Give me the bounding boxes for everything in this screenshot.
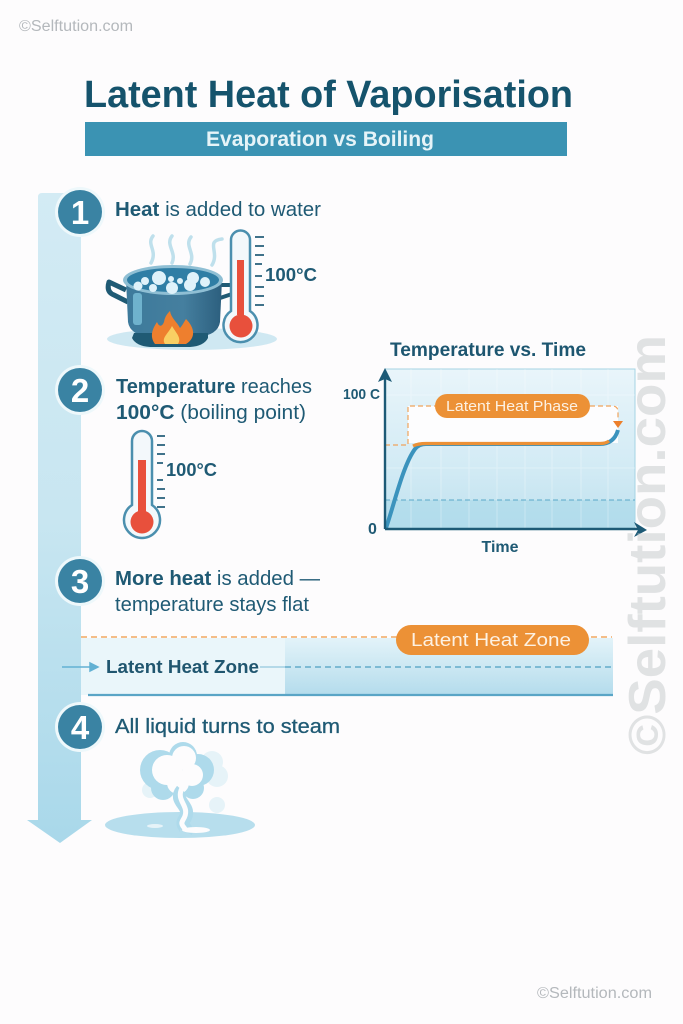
phase pill label: Latent Heat Phase [446,398,578,415]
step 2 badge [55,365,105,415]
step 2 text: Temperature reaches [116,376,312,398]
icon: boiling pot on flame [107,236,277,350]
step 3 badge [55,556,105,606]
step 3 text [115,568,320,616]
subtitle banner [85,122,567,156]
zone pill [396,625,589,655]
icon: steam cloud over puddle [105,742,255,838]
watermark: vertical: ©Selftution.com [619,335,677,755]
step 1 text: Heat is added to water [115,199,321,221]
icon: thermometer with 100°C (step 1): 100°C [265,265,317,285]
line chart: temperature vs time [343,368,647,556]
dashed guide [385,406,618,445]
plateau line [413,441,609,446]
watermark: top: ©Selftution.com [19,18,133,35]
step 2 badge: 2 [71,372,89,409]
axes [385,375,640,529]
flow arrow: left vertical [27,193,92,843]
step 1 badge [55,187,105,237]
step 1 badge: 1 [71,194,89,231]
zone pill label: Latent Heat Zone [411,630,571,650]
icon: thermometer with 100°C (step 2) [124,431,217,538]
phase pill [435,394,590,418]
x label: Time: Time [481,539,519,556]
watermark: bottom: ©Selftution.com [537,985,652,1002]
icon: thermometer with 100°C (step 1) [223,231,317,342]
step 2 text [116,376,312,424]
step 3 text: More heat is added — [115,568,320,590]
zone arrow [62,663,98,671]
y label: 100 C: 100 C [343,386,380,403]
step 3 badge: 3 [71,563,89,600]
step 4 badge [55,702,105,752]
marker [613,421,623,428]
step 4 badge: 4 [71,709,90,746]
y label: 0: 0 [368,521,377,538]
step 2 text: 100°C (boiling point) [116,402,306,424]
step 3 text: temperature stays flat [115,594,309,616]
heating curve [386,430,618,528]
subtitle banner: Evaporation vs Boiling [206,128,434,151]
step 4 text: All liquid turns to steam [115,716,340,738]
icon: thermometer with 100°C (step 2): 100°C [166,460,217,480]
latent heat zone band [62,625,613,695]
zone label: Latent Heat Zone [106,657,259,677]
title: Latent Heat of Vaporisation [84,74,573,116]
chart title: Temperature vs. Time [390,340,586,361]
